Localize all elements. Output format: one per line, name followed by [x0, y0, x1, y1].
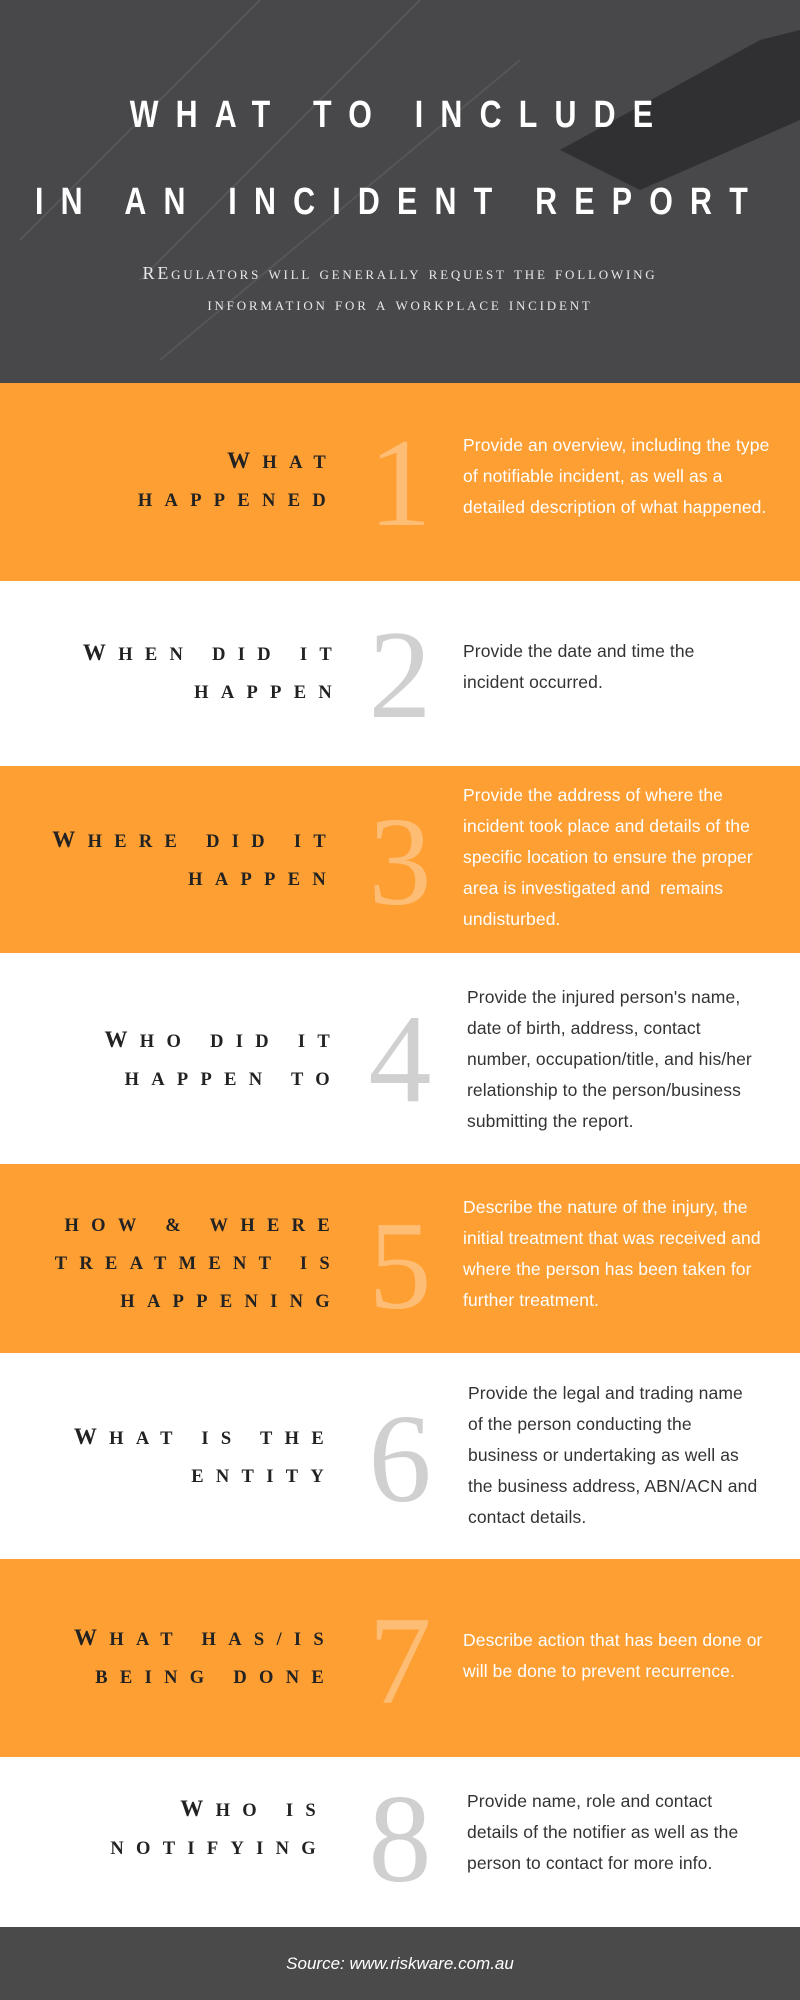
description 3: specific location to ensure the proper — [463, 847, 753, 867]
panel 8 — [0, 1757, 800, 1927]
title — [35, 94, 765, 223]
description 4: submitting the report. — [467, 1111, 634, 1131]
description 6: business or undertaking as well as — [468, 1445, 739, 1465]
footer — [0, 1927, 800, 2000]
numeral 6: 6 — [368, 1390, 432, 1529]
heading 2 — [83, 640, 344, 703]
numeral 8: 8 — [368, 1770, 432, 1909]
description 1: Provide an overview, including the type — [463, 435, 769, 455]
numeral 3: 3 — [368, 793, 432, 932]
panel 6 — [0, 1353, 800, 1559]
heading 8: NOTIFYING — [110, 1839, 328, 1859]
description 1: of notifiable incident, as well as a — [463, 466, 722, 486]
heading 7: WHAT HAS/IS — [74, 1625, 336, 1650]
heading 8 — [110, 1796, 328, 1859]
subtitle — [143, 263, 657, 314]
description 8 — [467, 1791, 738, 1873]
description 6: of the person conducting the — [468, 1414, 692, 1434]
heading 5: TREATMENT IS — [55, 1254, 342, 1274]
description 2 — [463, 641, 695, 692]
description 6 — [468, 1383, 757, 1527]
numeral 4: 4 — [368, 990, 432, 1129]
heading 1: HAPPENED — [138, 491, 338, 511]
heading 5 — [55, 1216, 342, 1312]
heading 4: WHO DID IT — [104, 1027, 342, 1052]
panel 5 — [0, 1164, 800, 1353]
panel 7 — [0, 1559, 800, 1757]
heading 1 — [138, 448, 338, 511]
title: WHAT TO INCLUDE — [130, 94, 670, 136]
description 4: relationship to the person/business — [467, 1080, 741, 1100]
description 3: undisturbed. — [463, 909, 561, 929]
description 7: Describe action that has been done or — [463, 1630, 762, 1650]
heading 1: WHAT — [227, 448, 338, 473]
description 4: number, occupation/title, and his/her — [467, 1049, 752, 1069]
numeral 1: 1 — [368, 414, 432, 553]
description 5 — [463, 1197, 761, 1310]
description 4: date of birth, address, contact — [467, 1018, 701, 1038]
heading 7 — [74, 1625, 336, 1688]
panel 2 — [0, 581, 800, 766]
description 7 — [463, 1630, 762, 1681]
description 2: incident occurred. — [463, 672, 603, 692]
description 3: Provide the address of where the — [463, 785, 723, 805]
heading 4 — [104, 1027, 342, 1090]
description 5: Describe the nature of the injury, the — [463, 1197, 748, 1217]
numeral 7: 7 — [368, 1592, 432, 1731]
heading 7: BEING DONE — [95, 1668, 336, 1688]
description 2: Provide the date and time the — [463, 641, 695, 661]
subtitle: REgulators will generally request the following — [143, 263, 657, 283]
title: IN AN INCIDENT REPORT — [35, 181, 765, 223]
panel 3 — [0, 766, 800, 953]
heading 6: ENTITY — [191, 1467, 336, 1487]
heading 4: HAPPEN TO — [125, 1070, 342, 1090]
numeral 5: 5 — [368, 1197, 432, 1336]
description 1: detailed description of what happened. — [463, 497, 766, 517]
description 6: Provide the legal and trading name — [468, 1383, 743, 1403]
description 6: contact details. — [468, 1507, 586, 1527]
description 4 — [467, 987, 752, 1131]
description 7: will be done to prevent recurrence. — [463, 1661, 735, 1681]
description 8: Provide name, role and contact — [467, 1791, 712, 1811]
description 5: further treatment. — [463, 1290, 599, 1310]
heading 3 — [52, 827, 338, 890]
description 5: where the person has been taken for — [463, 1259, 752, 1279]
description 1 — [463, 435, 769, 517]
description 3: incident took place and details of the — [463, 816, 750, 836]
heading 2: HAPPEN — [194, 683, 344, 703]
description 3: area is investigated and remains — [463, 878, 723, 898]
description 5: initial treatment that was received and — [463, 1228, 761, 1248]
heading 5: HOW & WHERE — [64, 1216, 342, 1236]
subtitle: information for a workplace incident — [207, 294, 593, 314]
heading 5: HAPPENING — [120, 1292, 342, 1312]
footer: Source: www.riskware.com.au — [286, 1954, 514, 1973]
heading 2: WHEN DID IT — [83, 640, 344, 665]
heading 3: WHERE DID IT — [52, 827, 338, 852]
numeral 2: 2 — [368, 606, 432, 745]
description 8: details of the notifier as well as the — [467, 1822, 738, 1842]
description 4: Provide the injured person's name, — [467, 987, 740, 1007]
description 8: person to contact for more info. — [467, 1853, 712, 1873]
heading 6 — [74, 1424, 336, 1487]
heading 6: WHAT IS THE — [74, 1424, 336, 1449]
description 6: the business address, ABN/ACN and — [468, 1476, 757, 1496]
heading 8: WHO IS — [180, 1796, 328, 1821]
header — [0, 0, 800, 383]
description 3 — [463, 785, 753, 929]
panel 4 — [0, 953, 800, 1164]
heading 3: HAPPEN — [188, 870, 338, 890]
panel 1 — [0, 383, 800, 581]
